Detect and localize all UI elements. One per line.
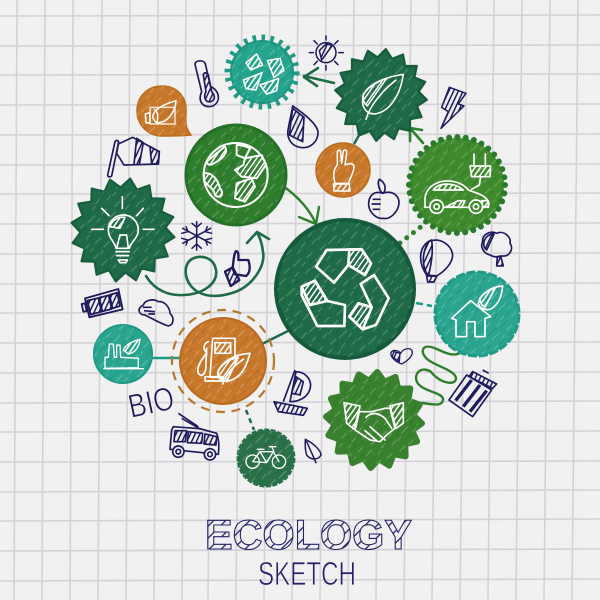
- icon: small leaf: [305, 439, 321, 463]
- panel: orange speech pin: [137, 86, 191, 136]
- connector: peace to leaf: [354, 130, 362, 144]
- panel: factory teal circle: [94, 325, 152, 383]
- text: BIO: BIO: [125, 379, 177, 425]
- icon: globe: [204, 143, 268, 207]
- connector: car to recycle dotted: [400, 226, 422, 243]
- connector: fuel to bike dashed: [246, 410, 254, 430]
- icon: factory with leaf: [103, 339, 144, 369]
- icon: recycled fish: [243, 54, 284, 94]
- panel: house teal circle: [435, 272, 519, 356]
- panel: peace hand orange circle: [316, 143, 370, 197]
- icon: tree: [482, 232, 512, 266]
- icon: sailboat: [274, 370, 311, 415]
- icon: leaf in box: [145, 101, 176, 124]
- title: ECOLOGY: ECOLOGY: [205, 511, 412, 558]
- icon: trash bin: [449, 370, 497, 417]
- icon: recycle symbol: [302, 249, 389, 329]
- panel: earth circle: [186, 125, 286, 225]
- panel: leaf spiky badge: [330, 44, 432, 146]
- arrow: earth to recycle: [283, 186, 319, 224]
- arrow: curly bulb to up arrow: [146, 232, 269, 296]
- icon: hot air balloon: [421, 240, 453, 282]
- icon: bicycle: [246, 447, 286, 468]
- icon: thumbs up: [225, 251, 250, 286]
- subtitle: SKETCH: SKETCH: [258, 555, 356, 592]
- icon: car with plug: [425, 154, 491, 213]
- panel: handshake gear badge: [323, 369, 425, 471]
- icon: peace sign hand: [333, 150, 354, 191]
- squiggle: house to handshake: [416, 347, 460, 404]
- icon: lightning bolt: [441, 87, 466, 128]
- icon: battery: [82, 289, 123, 317]
- icon: snowflake: [182, 222, 212, 250]
- icon: leaf: [363, 74, 403, 119]
- panel: recycling hub circle: [276, 220, 414, 358]
- arrow: leaf to fish: [304, 68, 334, 86]
- icon: trolleybus: [170, 413, 219, 460]
- panel: lightbulb star badge: [64, 171, 182, 289]
- icon: house with leaf: [452, 286, 503, 337]
- icon: water drop: [288, 106, 318, 148]
- arrow: car to leaf: [410, 128, 423, 143]
- icon: handshake: [344, 403, 403, 442]
- panel: biofuel orange circle: [180, 318, 266, 404]
- icon: sun: [309, 36, 343, 70]
- icon: apple: [369, 179, 399, 219]
- connector: recycle to house: [416, 303, 432, 306]
- icon: windsock flag: [108, 137, 159, 177]
- icon: heart: [391, 349, 412, 364]
- connector: fuel to recycle: [262, 330, 290, 344]
- icon: thermometer: [195, 61, 218, 107]
- panel: electric car dotted circle: [409, 137, 505, 233]
- icon: light bulb: [92, 197, 154, 263]
- panel: bicycle green circle: [238, 430, 294, 486]
- icon: fuel pump and leaf: [198, 338, 250, 384]
- dashed ring around fuel: [172, 310, 274, 412]
- icon: cloud: [139, 300, 173, 326]
- panel: fish recycle teal gear: [229, 39, 295, 105]
- connector: factory to fuel: [150, 357, 182, 359]
